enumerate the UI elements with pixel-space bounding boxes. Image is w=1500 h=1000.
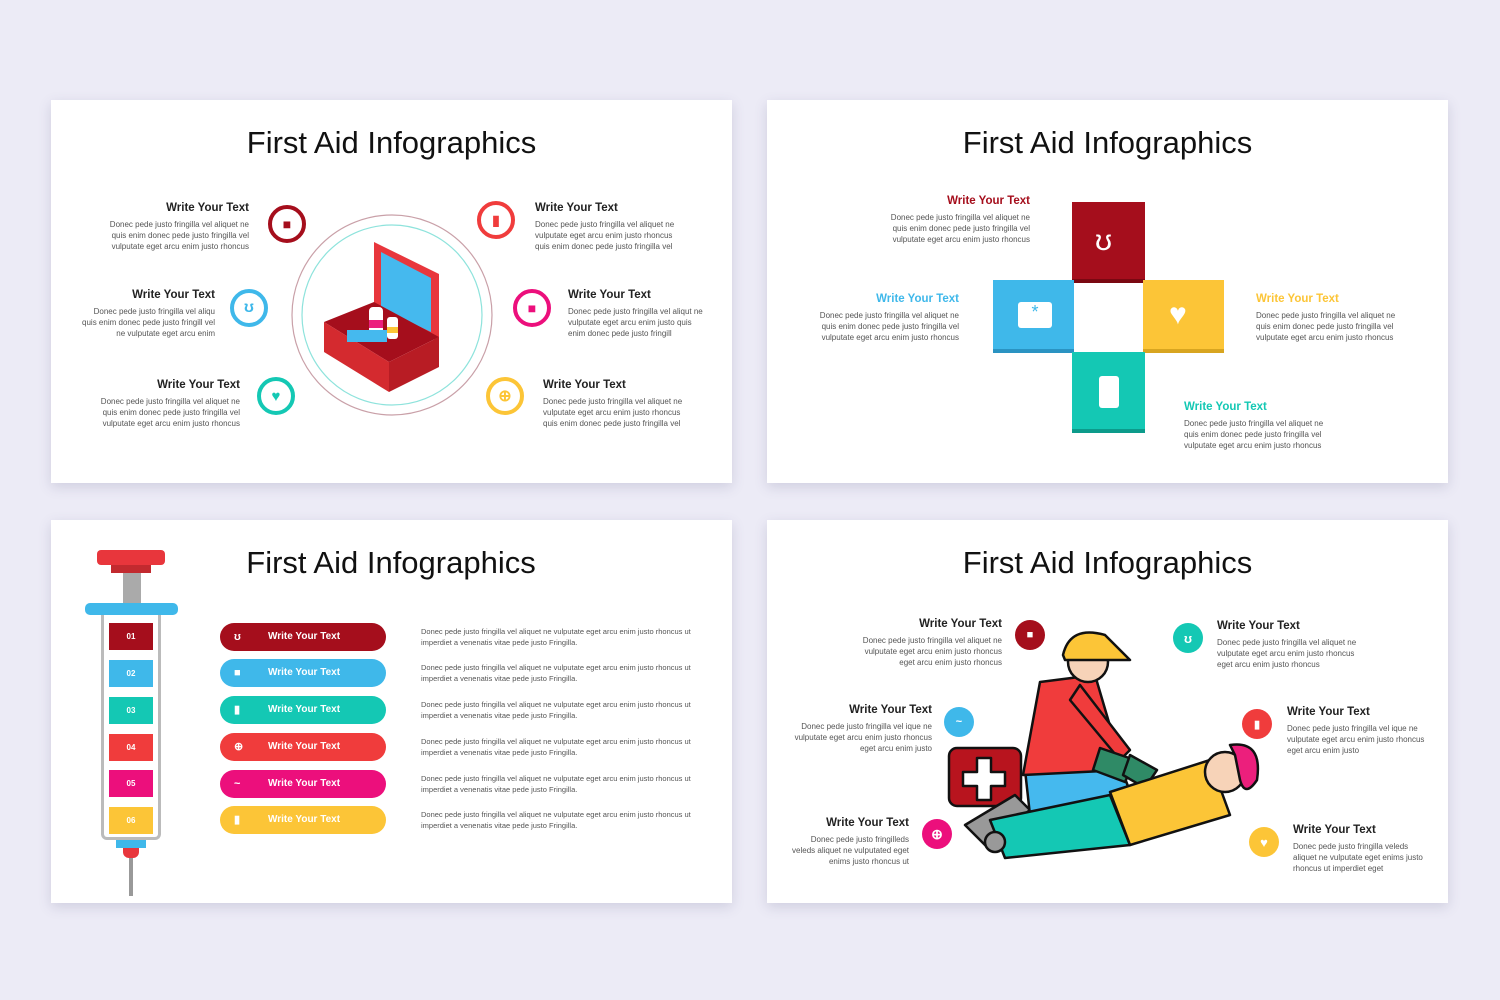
list buttons: ■ (234, 667, 241, 679)
item: right 3: ♥ (1260, 834, 1268, 850)
syringe: 02 (127, 669, 135, 678)
text: bottom: Write Your Text (1184, 401, 1267, 413)
list buttons: Donec pede justo fringilla vel aliquet ne vulputate eget arcu enim justo rhoncus ut imperdiet a venenatis vitae pede justo Fringilla. (421, 737, 691, 757)
title: First Aid Infographics (963, 545, 1252, 580)
item: left 3: Write Your Text (826, 817, 909, 829)
list buttons: Write Your Text (268, 814, 340, 825)
list buttons: Write Your Text (268, 704, 340, 715)
item: stethoscope: Donec pede justo fringilla vel aliqu quis enim donec pede justo fringill vel ne vulputate eget arcu enim (82, 307, 215, 338)
item: ambulance (110, 202, 249, 251)
item: first aid box: ■ (528, 300, 536, 316)
title: First Aid Infographics (963, 125, 1252, 160)
panel: first aid kit: Donec pede justo fringilla vel aliquet ne vulputate eget arcu enim justo rhoncus quis enim donec pede justo fringilla vel (535, 220, 674, 251)
list buttons: ⊕ (234, 741, 243, 753)
panel: first aid kit: Donec pede justo fringilla vel aliquet ne vulputate eget arcu enim justo rhoncus quis enim donec pede justo fringilla vel (543, 397, 682, 428)
panel: first aid kit: Write Your Text (535, 202, 618, 214)
panel: paramedic: Donec pede justo fringilla veleds aliquet ne vulputate eget enims justo rhoncus ut imperdiet eget (1293, 842, 1423, 873)
list buttons: ▮ (234, 814, 240, 826)
text: left: Write Your Text (876, 293, 959, 305)
cross diagram: * (1031, 302, 1038, 322)
list buttons: Donec pede justo fringilla vel aliquet ne vulputate eget arcu enim justo rhoncus ut imperdiet a venenatis vitae pede justo Fringilla. (421, 810, 691, 830)
text: left (820, 293, 959, 342)
item: first aid box (513, 289, 551, 327)
text: top: Write Your Text (947, 195, 1030, 207)
list buttons: Write Your Text (268, 631, 340, 642)
item: ambulance: Donec pede justo fringilla vel aliquet ne quis enim donec pede justo fringilla vel vulputate eget arcu enim justo rhoncus (110, 220, 249, 251)
item: right 1 (1173, 623, 1203, 653)
panel: paramedic: Write Your Text (1293, 824, 1376, 836)
item: heart: Donec pede justo fringilla vel aliquet ne quis enim donec pede justo fringilla vel vulputate eget arcu enim justo rhoncus (101, 397, 240, 428)
text: right: Write Your Text (1256, 293, 1339, 305)
cross diagram: ʊ (1095, 224, 1112, 257)
syringe: 04 (127, 743, 135, 752)
list buttons: Donec pede justo fringilla vel aliquet ne vulputate eget arcu enim justo rhoncus ut imperdiet a venenatis vitae pede justo Fringilla. (421, 663, 691, 683)
item: left 3 (792, 817, 909, 866)
item: left 2: Write Your Text (849, 704, 932, 716)
item: stethoscope: Write Your Text (132, 289, 215, 301)
syringe: 05 (127, 779, 135, 788)
title: First Aid Infographics (246, 545, 536, 580)
list buttons: Donec pede justo fringilla vel aliquet ne vulputate eget arcu enim justo rhoncus ut imperdiet a venenatis vitae pede justo Fringilla. (421, 627, 691, 647)
list buttons: Write Your Text (268, 667, 340, 678)
list buttons (220, 623, 691, 834)
item: medicine (477, 201, 515, 239)
item: right 3 (1249, 827, 1279, 857)
text: bottom: Donec pede justo fringilla vel aliquet ne quis enim donec pede justo fringilla vel vulputate eget arcu enim justo rhoncus (1184, 419, 1323, 450)
panel: first aid kit: ♥ (272, 388, 280, 404)
list buttons: ʊ (234, 631, 241, 643)
item: stethoscope (82, 289, 215, 338)
text: top: Donec pede justo fringilla vel aliquet ne quis enim donec pede justo fringilla vel vulputate eget arcu enim justo rhoncus (891, 213, 1030, 244)
panel: paramedic: ■ (1027, 629, 1033, 641)
panel: paramedic: Donec pede justo fringilla vel aliquet ne vulputate eget arcu enim justo rhoncus eget arcu enim justo rhoncus (1217, 638, 1356, 669)
cross diagram: ♥ (1169, 298, 1187, 331)
panel: paramedic: ⊕ (931, 826, 943, 842)
syringe: 03 (127, 706, 135, 715)
list buttons: Write Your Text (268, 778, 340, 789)
panel: first aid kit: Write Your Text (568, 289, 651, 301)
text: left: Donec pede justo fringilla vel aliquet ne quis enim donec pede justo fringilla vel vulputate eget arcu enim justo rhoncus (820, 311, 959, 342)
panel: paramedic (767, 520, 1448, 903)
text: right (1256, 293, 1395, 342)
item: right 1: ʊ (1184, 630, 1192, 646)
item: heart (101, 379, 240, 428)
item: medicine: ▮ (492, 212, 500, 228)
panel: first aid kit: Donec pede justo fringilla vel aliqut ne vulputate eget arcu enim justo quis enim donec pede justo fringill (568, 307, 703, 338)
item: left 2: Donec pede justo fringilla vel ique ne vulputate eget arcu enim justo rhoncus eget arcu enim justo (795, 722, 932, 753)
syringe: 06 (127, 816, 135, 825)
item: ambulance: Write Your Text (166, 202, 249, 214)
panel: paramedic: Write Your Text (1287, 706, 1370, 718)
item: heart: Write Your Text (157, 379, 240, 391)
text: bottom (1184, 401, 1323, 450)
item: right 2 (1242, 709, 1272, 739)
panel: first aid kit: ■ (283, 216, 291, 232)
list buttons: ▮ (234, 704, 240, 716)
panel: first aid kit (51, 100, 732, 483)
circle ring with kit (291, 214, 493, 416)
syringe: 01 (127, 632, 135, 641)
text: top (891, 195, 1030, 244)
cross diagram (993, 202, 1224, 433)
item: left 2 (794, 704, 932, 753)
item: left 1: Write Your Text (919, 618, 1002, 630)
list buttons: ~ (234, 778, 240, 790)
item: left 3: Donec pede justo fringilleds veleds aliquet ne vulputated eget enims justo rhoncus ut (792, 835, 909, 866)
list buttons: Write Your Text (268, 741, 340, 752)
panel: paramedic: Donec pede justo fringilla vel ique ne vulputate eget arcu enim justo rhoncus eget arcu enim justo (1287, 724, 1424, 755)
panel: first aid kit: ʊ (244, 299, 254, 316)
text: right: Donec pede justo fringilla vel aliquet ne quis enim donec pede justo fringilla vel vulputate eget arcu enim justo rhoncus (1256, 311, 1395, 342)
item: right 2: ▮ (1254, 718, 1260, 730)
panel: paramedic: ~ (956, 716, 962, 728)
item: plus: ⊕ (498, 388, 512, 405)
panel: first aid kit: Write Your Text (543, 379, 626, 391)
item: left 1: Donec pede justo fringilla vel aliquet ne vulputate eget arcu enim justo rhoncus eget arcu enim justo rhoncus (863, 636, 1002, 667)
illustration: paramedic helping patient (948, 631, 1260, 860)
panel: syringe list (51, 520, 732, 903)
list buttons: Donec pede justo fringilla vel aliquet ne vulputate eget arcu enim justo rhoncus ut imperdiet a venenatis vitae pede justo Fringilla. (421, 700, 691, 720)
panel: cross (767, 100, 1448, 483)
item: plus (486, 377, 524, 415)
title: First Aid Infographics (247, 125, 536, 160)
panel: paramedic: Write Your Text (1217, 620, 1300, 632)
syringe (85, 550, 178, 896)
item: left 1 (863, 618, 1002, 667)
list buttons: Donec pede justo fringilla vel aliquet ne vulputate eget arcu enim justo rhoncus ut imperdiet a venenatis vitae pede justo Fringilla. (421, 774, 691, 794)
